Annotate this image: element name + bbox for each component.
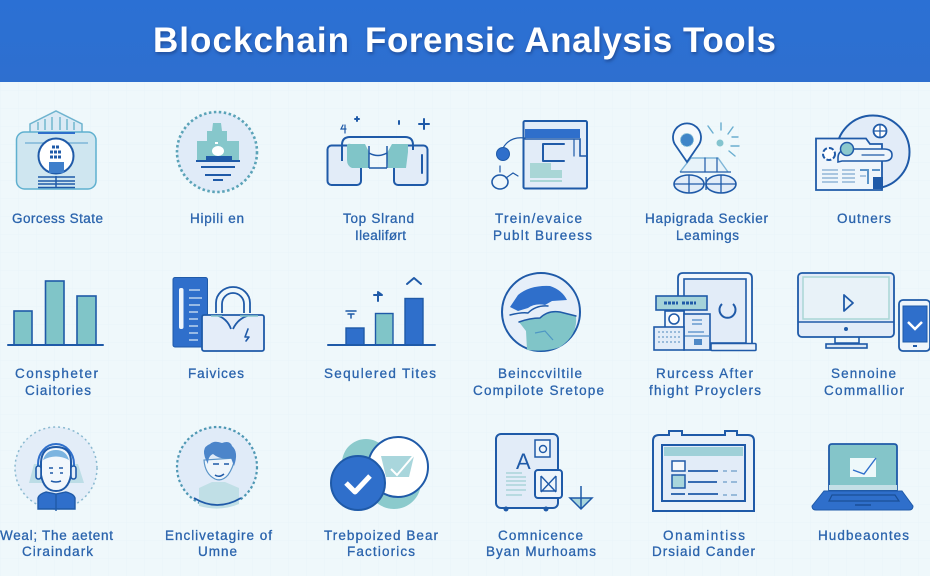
icon: circle landscape <box>502 273 580 351</box>
icon: calendar window <box>653 431 754 511</box>
icon: rising bars <box>328 278 435 345</box>
panel: Weal; The aetent <box>0 427 113 559</box>
label: Hudbeaontes <box>818 528 909 543</box>
panel: Onamintiss Drsiaid Cander <box>652 431 756 559</box>
label: Onamintiss <box>663 528 745 543</box>
icon: map pin on vehicle <box>673 123 739 193</box>
label: Top Slrand <box>343 211 414 226</box>
label: Ilealiført <box>355 228 406 243</box>
panel: Trein/evaice <box>492 121 592 243</box>
icon: person avatar <box>177 427 257 509</box>
panel: Gorcess State <box>12 111 103 226</box>
panel: Faivices <box>173 278 264 381</box>
icon: document with arrow: A <box>516 449 531 474</box>
label: Publt Bureess <box>493 228 592 243</box>
label: Outners <box>837 211 891 226</box>
icon: folder and globe <box>816 116 910 190</box>
label <box>645 211 768 243</box>
title: Forensic Analysis Tools <box>365 21 776 60</box>
label: Conspheter <box>15 366 98 381</box>
label: Gorcess State <box>12 211 103 226</box>
title <box>153 21 776 60</box>
label: Commallior <box>824 383 904 398</box>
icon: tablet with cards <box>654 273 756 350</box>
panel: Hapigrada Seckier <box>645 123 768 243</box>
label: Sennoine <box>831 366 896 381</box>
label: Faivices <box>188 366 244 381</box>
panel: Hudbeaontes <box>812 444 913 543</box>
panel: Sequlered Tites <box>324 278 436 381</box>
panel: Hipili en <box>177 112 257 226</box>
label: Hapigrada Seckier <box>645 211 768 226</box>
label: Drsiaid Cander <box>652 544 756 559</box>
label <box>343 211 414 243</box>
panel: Outners <box>816 116 910 226</box>
label: Leamings <box>676 228 739 243</box>
label: Ciraindark <box>22 544 93 559</box>
panel: Conspheter Ciaitories <box>8 281 103 398</box>
label <box>493 211 592 243</box>
label: Rurcess After <box>656 366 754 381</box>
label: Enclivetagire of <box>165 528 272 543</box>
label: Factiorics <box>347 544 415 559</box>
icon: institution seal <box>16 111 96 189</box>
label <box>652 528 756 559</box>
panel: Beinccviltile Compilote Sretope <box>473 273 604 398</box>
icon: headset avatar <box>15 427 97 511</box>
icon: dotted circle with building <box>177 112 257 192</box>
label: Sequlered Tites <box>324 366 436 381</box>
label: Trein/evaice <box>495 211 582 226</box>
label <box>15 366 98 398</box>
panel: Rurcess After <box>649 273 761 398</box>
icon: bar chart <box>8 281 103 345</box>
label: Compilote Sretope <box>473 383 604 398</box>
icon: document window with node <box>492 121 587 189</box>
label <box>473 366 604 398</box>
label: Beinccviltile <box>498 366 582 381</box>
label <box>324 528 438 559</box>
label: Weal; The aetent <box>0 528 113 543</box>
label <box>649 366 761 398</box>
header banner <box>0 0 930 82</box>
label: Byan Murhoams <box>486 544 596 559</box>
icon: server and padlock <box>173 278 264 351</box>
icon: monitor and phone <box>798 273 930 351</box>
label: Umne <box>198 544 237 559</box>
title: Blockchain <box>153 21 349 60</box>
panel: Comnicence Byan Murhoams <box>486 434 596 559</box>
icon: laptop <box>812 444 913 510</box>
icon: overlapping cards and goggles <box>328 117 429 185</box>
panel: Sennoine Commallior <box>798 273 930 398</box>
label <box>165 528 272 559</box>
label: fhight Proyclers <box>649 383 761 398</box>
label: Trebpoized Bear <box>324 528 438 543</box>
panel: Top Slrand <box>328 117 429 243</box>
panel: Trebpoized Bear <box>324 437 438 559</box>
label: Comnicence <box>498 528 583 543</box>
label: Ciaitories <box>25 383 91 398</box>
label: Hipili en <box>190 211 244 226</box>
label <box>824 366 904 398</box>
label <box>0 528 113 559</box>
icon: check badges <box>331 437 428 510</box>
panel: Enclivetagire of Umne <box>165 427 272 559</box>
label <box>486 528 596 559</box>
